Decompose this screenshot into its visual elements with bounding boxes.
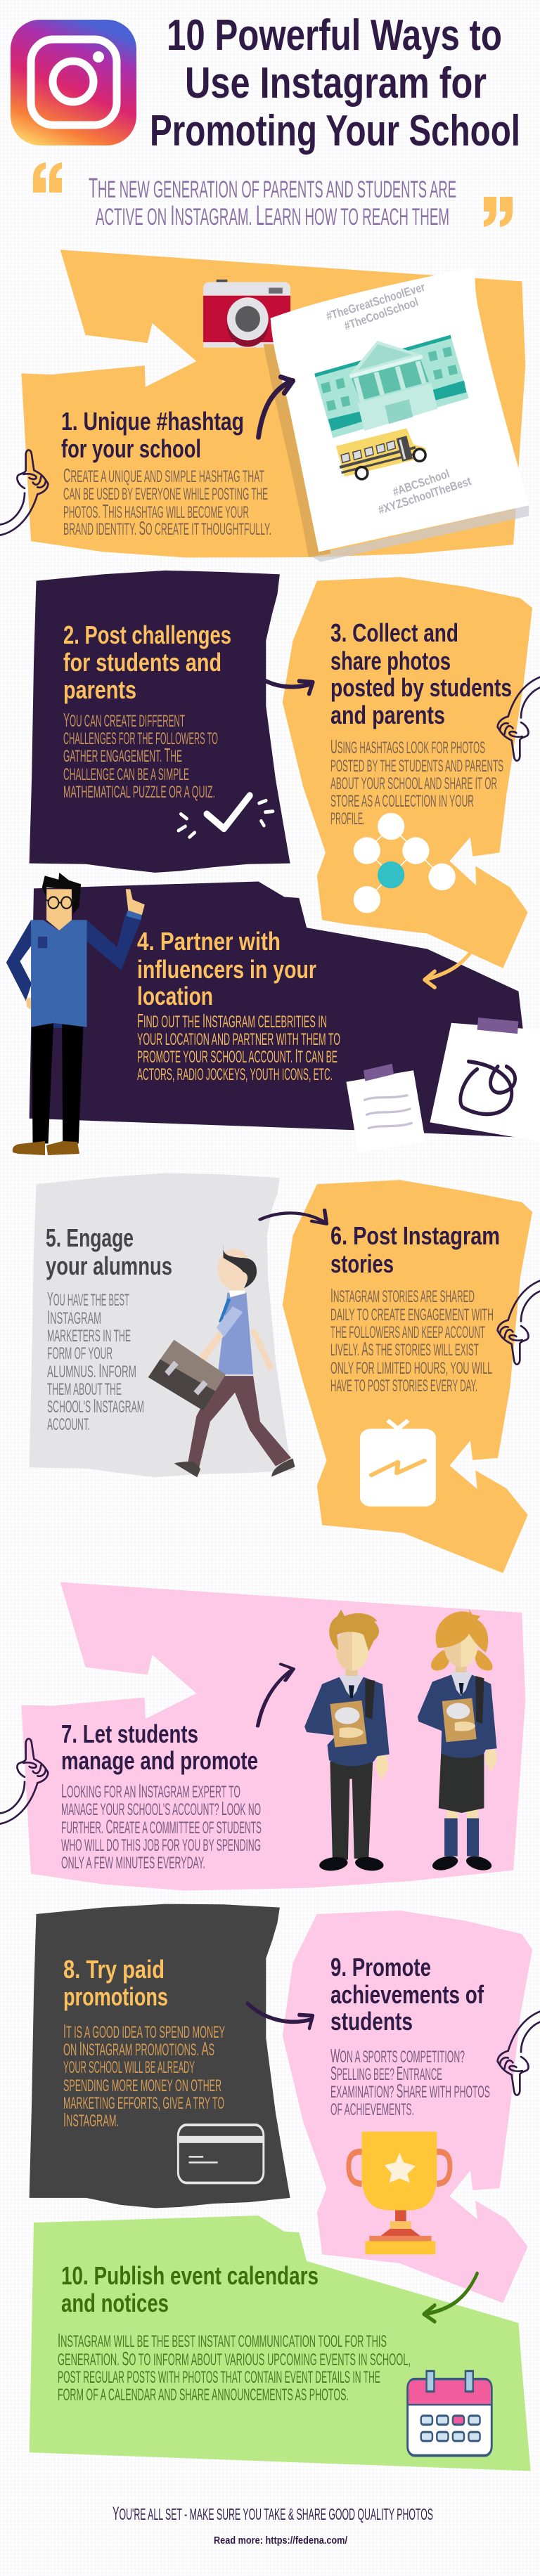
- body text: GATHER ENGAGEMENT. THE: [63, 744, 182, 766]
- body text: PHOTOS. THIS HASHTAG WILL BECOME YOUR: [63, 500, 249, 522]
- heading: parents: [63, 675, 136, 704]
- panel: step 6 post Instagram stories: [283, 1180, 540, 1573]
- hashtags top: [325, 280, 427, 333]
- body text: [330, 1284, 494, 1396]
- body text: SPELLING BEE? ENTRANCE: [330, 2062, 442, 2084]
- heading: 5. Engage: [46, 1223, 134, 1252]
- heading: stories: [330, 1249, 394, 1278]
- heading: achievements of: [330, 1980, 484, 2009]
- body text: FIND OUT THE INSTAGRAM CELEBRITIES IN: [137, 1010, 327, 1032]
- heading: 6. Post Instagram: [330, 1221, 500, 1250]
- icon: calendar: [408, 2371, 491, 2456]
- hashtags bottom: #XYZSchoolTheBest: [376, 474, 473, 517]
- body text: [63, 464, 271, 539]
- body text: PROFILE.: [330, 809, 365, 828]
- arrow: step 8 to step 9: [248, 2003, 313, 2028]
- illustration: walking man with briefcase: [148, 1244, 295, 1477]
- heading: [330, 1221, 500, 1278]
- heading: [46, 1223, 172, 1280]
- icon: camera: [203, 280, 290, 348]
- heading: [63, 620, 231, 704]
- body text: YOU HAVE THE BEST: [47, 1288, 129, 1310]
- heading: share photos: [330, 646, 451, 675]
- heading: [137, 927, 316, 1010]
- body text: MATHEMATICAL PUZZLE OR A QUIZ.: [63, 783, 215, 802]
- body text: LOOKING FOR AN INSTAGRAM EXPERT TO: [61, 1780, 240, 1802]
- body text: SCHOOL'S INSTAGRAM: [47, 1395, 144, 1417]
- body text: INSTAGRAM: [47, 1306, 101, 1328]
- panel: step 5 engage alumnus: [30, 1173, 295, 1477]
- heading: [61, 1719, 258, 1775]
- heading: [61, 407, 244, 463]
- body text: [137, 1010, 340, 1084]
- icon: pointing hand: [0, 450, 48, 535]
- heading: for students and: [63, 648, 221, 677]
- heading: location: [137, 982, 213, 1010]
- hashtags top: #TheGreatSchoolEver: [325, 280, 427, 323]
- heading: 8. Try paid: [63, 1955, 165, 1984]
- heading: promotions: [63, 1982, 168, 2011]
- heading: 7. Let students: [61, 1719, 198, 1748]
- body text: SPENDING MORE MONEY ON OTHER: [63, 2076, 221, 2095]
- heading: and notices: [61, 2289, 169, 2317]
- body text: BRAND IDENTITY. SO CREATE IT THOUGHTFULLY.: [63, 517, 271, 539]
- body text: [330, 736, 503, 828]
- panel: step 2 post challenges: [30, 571, 290, 873]
- body text: [47, 1288, 144, 1434]
- footer link: Read more: https://fedena.com/: [214, 2535, 348, 2546]
- arrow: step 9 to step 10: [424, 2273, 477, 2322]
- body text: INSTAGRAM.: [63, 2109, 119, 2131]
- body text: [330, 2045, 490, 2119]
- panel: step 7 let students manage: [0, 1582, 525, 1891]
- heading: for your school: [61, 434, 201, 463]
- body text: ACTORS, RADIO JOCKEYS, YOUTH ICONS, ETC.: [137, 1065, 333, 1084]
- heading: 10. Publish event calendars: [61, 2261, 319, 2290]
- heading: and parents: [330, 701, 445, 729]
- panel: step 2 post challenges: CHALLENGES FOR THE FOLLOWERS TO: [63, 729, 218, 748]
- icon: check mark: [179, 795, 273, 837]
- body text: [61, 1780, 262, 1873]
- heading: [330, 618, 512, 729]
- panel: step 8 try paid promotions: [30, 1904, 290, 2208]
- illustration: boy student: [304, 1610, 390, 1873]
- panel: step 9 promote achievements: [283, 1911, 540, 2303]
- body text: ONLY A FEW MINUTES EVERYDAY.: [61, 1854, 205, 1873]
- icon: trophy: [349, 2131, 450, 2254]
- heading: manage and promote: [61, 1746, 258, 1775]
- hashtags top: #TheCoolSchool: [342, 295, 420, 333]
- panel: step 4 partner with influencers: [6, 873, 540, 1155]
- body text: ACCOUNT.: [47, 1415, 90, 1434]
- illustration: school bus: [336, 428, 427, 479]
- illustration: man with glasses thumbs up: [6, 873, 145, 1155]
- icon: IGTV: [360, 1420, 436, 1507]
- heading: [330, 1953, 484, 2036]
- body text: ON INSTAGRAM PROMOTIONS. AS: [63, 2038, 214, 2060]
- illustration: girl student: [418, 1609, 497, 1873]
- heading: your alumnus: [46, 1251, 172, 1280]
- icon: pointing hand: [498, 1279, 540, 1365]
- icon: credit card: [178, 2125, 264, 2183]
- panel: step 1 unique hashtag: CAN BE USED BY EVERYONE WHILE POSTING THE: [63, 485, 268, 504]
- icon: closing quote mark: [484, 197, 513, 227]
- body text: ALUMNUS. INFORM: [47, 1360, 136, 1381]
- arrow: step 2 to step 3: [266, 681, 313, 694]
- heading: 3. Collect and: [330, 618, 458, 647]
- icon: pointing hand: [498, 2010, 540, 2095]
- heading: 2. Post challenges: [63, 620, 231, 649]
- body text: FORM OF YOUR: [47, 1344, 112, 1363]
- body text: MARKETERS IN THE: [47, 1327, 131, 1346]
- body text: CREATE A UNIQUE AND SIMPLE HASHTAG THAT: [63, 464, 264, 486]
- body text: YOU CAN CREATE DIFFERENT: [63, 709, 185, 731]
- title: [150, 11, 520, 155]
- body text: YOUR SCHOOL WILL BE ALREADY: [63, 2058, 195, 2077]
- subtitle: [89, 173, 456, 231]
- body text: OF ACHIEVEMENTS.: [330, 2100, 414, 2119]
- icon: Instagram logo: [11, 20, 136, 145]
- heading: 4. Partner with: [137, 927, 281, 956]
- arrow: to students: [258, 1664, 293, 1726]
- body text: MANAGE YOUR SCHOOL'S ACCOUNT? LOOK NO: [61, 1797, 261, 1819]
- body text: WHO WILL DO THIS JOB FOR YOU BY SPENDING: [61, 1836, 261, 1855]
- icon: network of circles: [354, 813, 456, 913]
- body text: YOUR LOCATION AND PARTNER WITH THEM TO: [137, 1030, 340, 1049]
- illustration: school building: [314, 335, 469, 438]
- icon: opening quote mark: [33, 162, 62, 193]
- body text: FURTHER. CREATE A COMMITTEE OF STUDENTS: [61, 1816, 262, 1837]
- body text: MARKETING EFFORTS, GIVE A TRY TO: [63, 2094, 224, 2113]
- heading: students: [330, 2007, 413, 2036]
- body text: CHALLENGE CAN BE A SIMPLE: [63, 765, 189, 784]
- panel: step 1 unique hashtag: [0, 249, 529, 562]
- body text: [63, 709, 218, 802]
- illustration: sticky notes: [346, 1017, 540, 1152]
- arrow: step 5 to step 6: [260, 1210, 327, 1224]
- body text: [63, 2020, 225, 2131]
- hashtags bottom: #ABCSchool: [391, 467, 451, 499]
- body text: PROMOTE YOUR SCHOOL ACCOUNT. IT CAN BE: [137, 1045, 338, 1067]
- heading: 1. Unique #hashtag: [61, 407, 244, 436]
- body text: [58, 2329, 411, 2405]
- icon: pointing hand: [0, 1738, 48, 1824]
- heading: influencers in your: [137, 955, 316, 984]
- arrow: step 3 to step 4: [425, 953, 470, 987]
- panel: step 3 collect and share photos: [283, 577, 540, 968]
- body text: THEM ABOUT THE: [47, 1380, 122, 1399]
- heading: [61, 2261, 319, 2317]
- heading: [63, 1955, 168, 2011]
- heading: 9. Promote: [330, 1953, 431, 1982]
- paper with school hashtags: [264, 267, 529, 562]
- icon: pointing hand: [498, 675, 540, 761]
- body text: IT IS A GOOD IDEA TO SPEND MONEY: [63, 2020, 225, 2042]
- panel: step 10 publish event calendars: [30, 2216, 531, 2471]
- arrow: to paper: [259, 377, 292, 437]
